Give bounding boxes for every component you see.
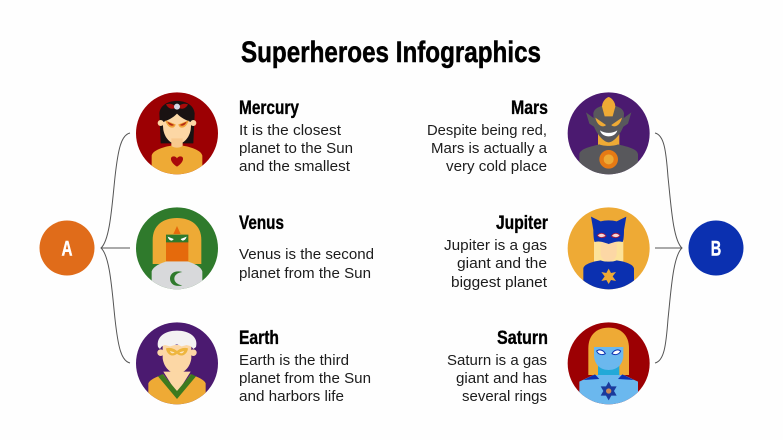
text: Jupiter: Jupiter is a gas <box>444 238 547 254</box>
text: Jupiter: giant and the <box>457 256 547 272</box>
text: Earth <box>239 328 371 405</box>
icon: Venus hero <box>136 207 218 290</box>
text: Earth: Earth <box>239 328 279 349</box>
text: Saturn <box>447 328 548 405</box>
icon: Mars hero <box>568 92 650 175</box>
text: Venus <box>239 213 374 282</box>
text: Earth: and harbors life <box>239 389 344 405</box>
text: Saturn: giant and has <box>456 371 547 387</box>
text: Mercury: and the smallest <box>239 159 350 175</box>
text: Mars: Mars <box>511 98 548 119</box>
text: Mercury: It is the closest <box>239 123 341 139</box>
brace B connector <box>655 133 682 363</box>
text: Saturn: several rings <box>462 389 547 405</box>
text: Jupiter <box>444 213 548 291</box>
text: Mars: Despite being red, <box>427 123 547 139</box>
title: Superheroes Infographics <box>241 36 541 69</box>
text: Venus: planet from the Sun <box>239 266 371 282</box>
text: Saturn: Saturn is a gas <box>447 353 547 369</box>
node B: B <box>711 238 721 260</box>
text: Venus: Venus is the second <box>239 247 374 263</box>
node B <box>688 220 744 276</box>
icon: Saturn hero <box>568 322 650 405</box>
text: Earth: Earth is the third <box>239 353 349 369</box>
text: Mars <box>427 98 548 175</box>
text: Mercury: planet to the Sun <box>239 141 353 157</box>
node A <box>40 220 94 276</box>
text: Mercury <box>239 98 353 175</box>
brace A connector <box>101 133 130 363</box>
text: Jupiter: biggest planet <box>451 275 547 291</box>
text: Venus: Venus <box>239 213 284 234</box>
icon: Jupiter hero <box>568 207 650 290</box>
text: Mars: very cold place <box>446 159 547 175</box>
text: Mercury: Mercury <box>239 98 299 119</box>
text: Saturn: Saturn <box>497 328 548 349</box>
icon: Mercury hero <box>136 92 218 175</box>
text: Jupiter: Jupiter <box>496 213 548 234</box>
text: Mars: Mars is actually a <box>431 141 548 157</box>
icon: Earth hero <box>136 322 218 405</box>
text: Earth: planet from the Sun <box>239 371 371 387</box>
node A: A <box>62 238 72 260</box>
